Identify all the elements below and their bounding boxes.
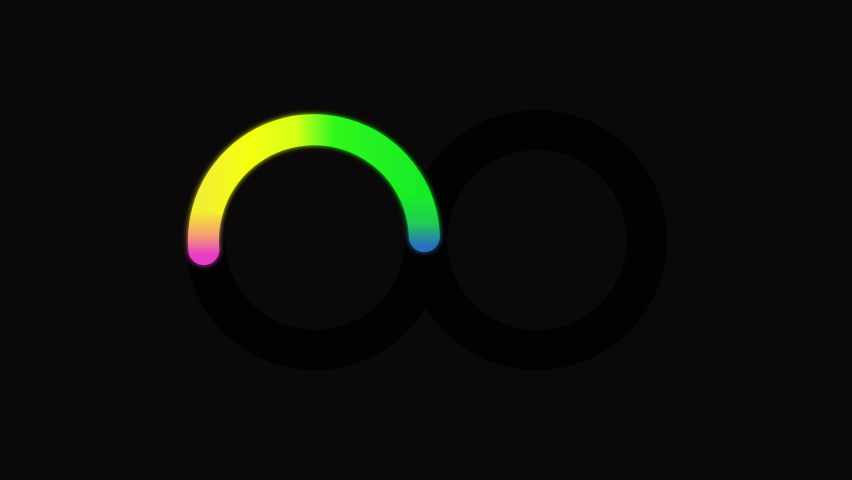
gradient arc	[203, 130, 424, 250]
left dark ring	[205, 130, 425, 350]
right dark ring	[427, 130, 647, 350]
